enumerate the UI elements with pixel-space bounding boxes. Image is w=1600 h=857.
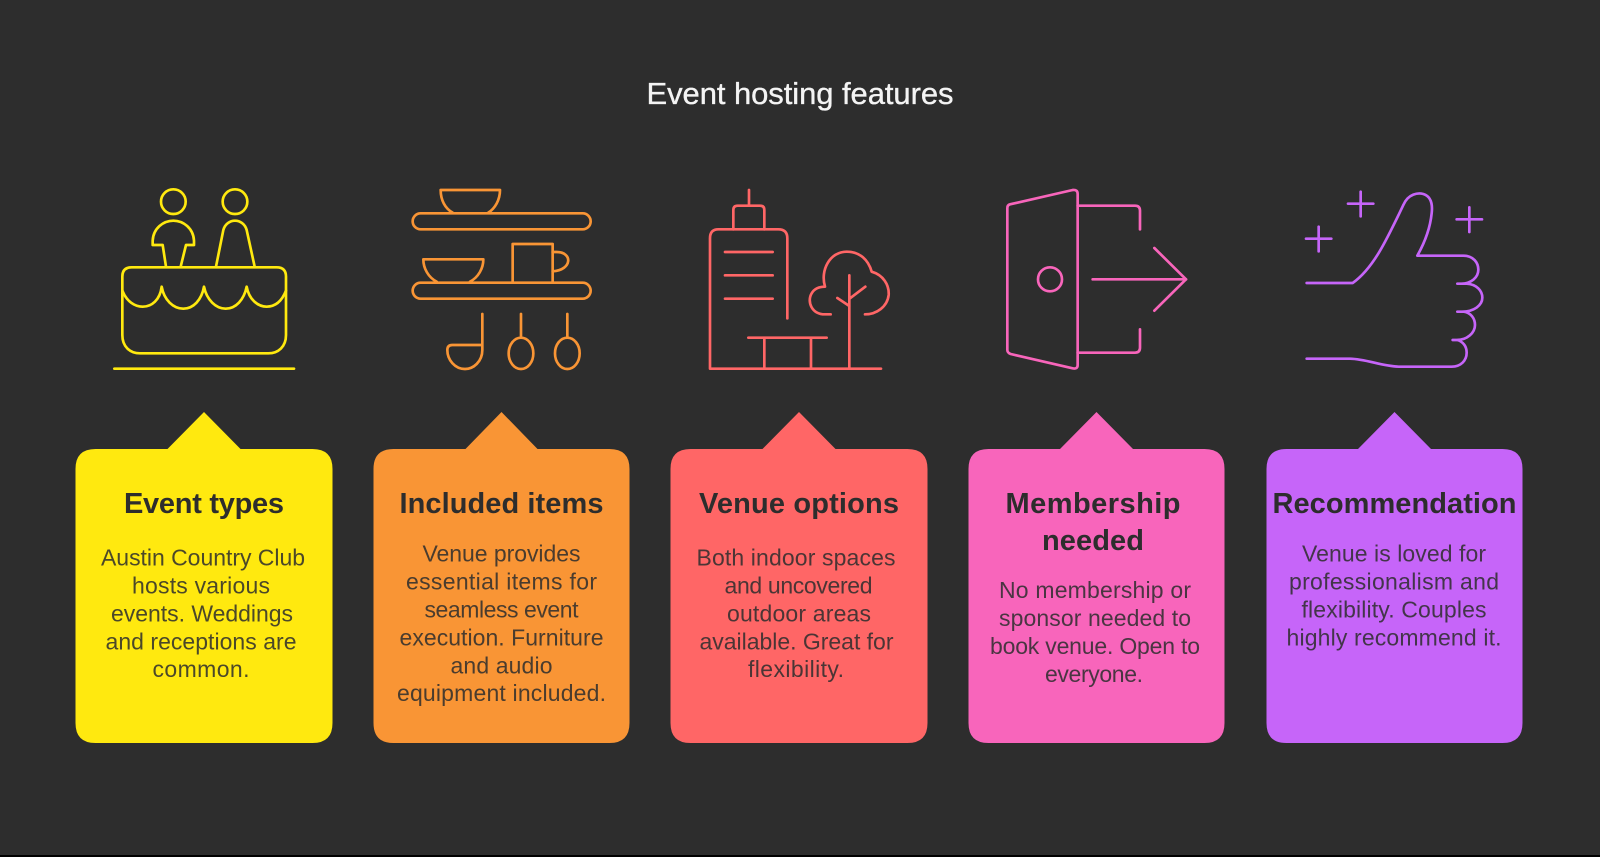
icon: cake with couple: [114, 189, 294, 369]
panel: membership needed: [968, 412, 1224, 743]
text: event types description: common.: [152, 656, 250, 682]
text: membership needed description: book venue. Open to: [990, 633, 1200, 659]
text: event types description: [101, 544, 305, 682]
text: included items description: seamless event: [424, 596, 579, 622]
text: event types description: and receptions are: [106, 628, 296, 654]
text: membership needed description: [990, 577, 1200, 687]
icon: tableware shelves: [413, 190, 591, 369]
text: membership needed description: everyone.: [1045, 661, 1143, 687]
text: membership needed description: sponsor needed to: [999, 605, 1191, 631]
text: venue options description: and uncovered: [724, 572, 872, 598]
panel: recommendation: [1266, 412, 1522, 743]
text: included items description: [397, 540, 606, 706]
text: included items description: execution. Furniture: [400, 624, 604, 650]
icon: open door with arrow: [1007, 190, 1186, 369]
text: event types description: Austin Country Club: [101, 544, 305, 570]
text: membership needed description: No membership or: [999, 577, 1191, 603]
heading: venue options: Venue options: [699, 488, 899, 520]
text: venue options description: outdoor areas: [727, 600, 871, 626]
text: included items description: Venue provides: [422, 540, 580, 566]
heading: event types: Event types: [124, 488, 284, 520]
heading: recommendation: Recommendation: [1272, 488, 1516, 520]
panel: venue options: [670, 412, 928, 743]
text: event types description: hosts various: [132, 572, 270, 598]
text: recommendation description: Venue is loved for: [1302, 540, 1486, 566]
text: recommendation description: flexibility. Couples: [1302, 596, 1486, 622]
text: included items description: equipment included.: [397, 680, 606, 706]
text: recommendation description: [1286, 540, 1502, 650]
text: venue options description: Both indoor spaces: [696, 544, 896, 570]
heading: included items: Included items: [400, 488, 604, 520]
icon: thumbs up: [1306, 192, 1482, 367]
heading: membership needed: Membership: [1006, 488, 1180, 520]
title: Event hosting features: [646, 76, 954, 111]
panel: event types: [76, 412, 332, 743]
text: recommendation description: professionalism and: [1289, 568, 1499, 594]
text: venue options description: [696, 544, 896, 682]
text: event types description: events. Weddings: [111, 600, 293, 626]
panel: included items: [374, 412, 630, 743]
text: included items description: and audio: [450, 652, 552, 678]
heading: membership needed: needed: [1042, 525, 1144, 557]
text: recommendation description: highly recommend it.: [1286, 624, 1502, 650]
heading: membership needed: [1006, 488, 1180, 557]
text: venue options description: flexibility.: [748, 656, 844, 682]
text: included items description: essential items for: [406, 568, 597, 594]
icon: building and tree: [710, 190, 889, 369]
text: venue options description: available. Great for: [700, 628, 894, 654]
